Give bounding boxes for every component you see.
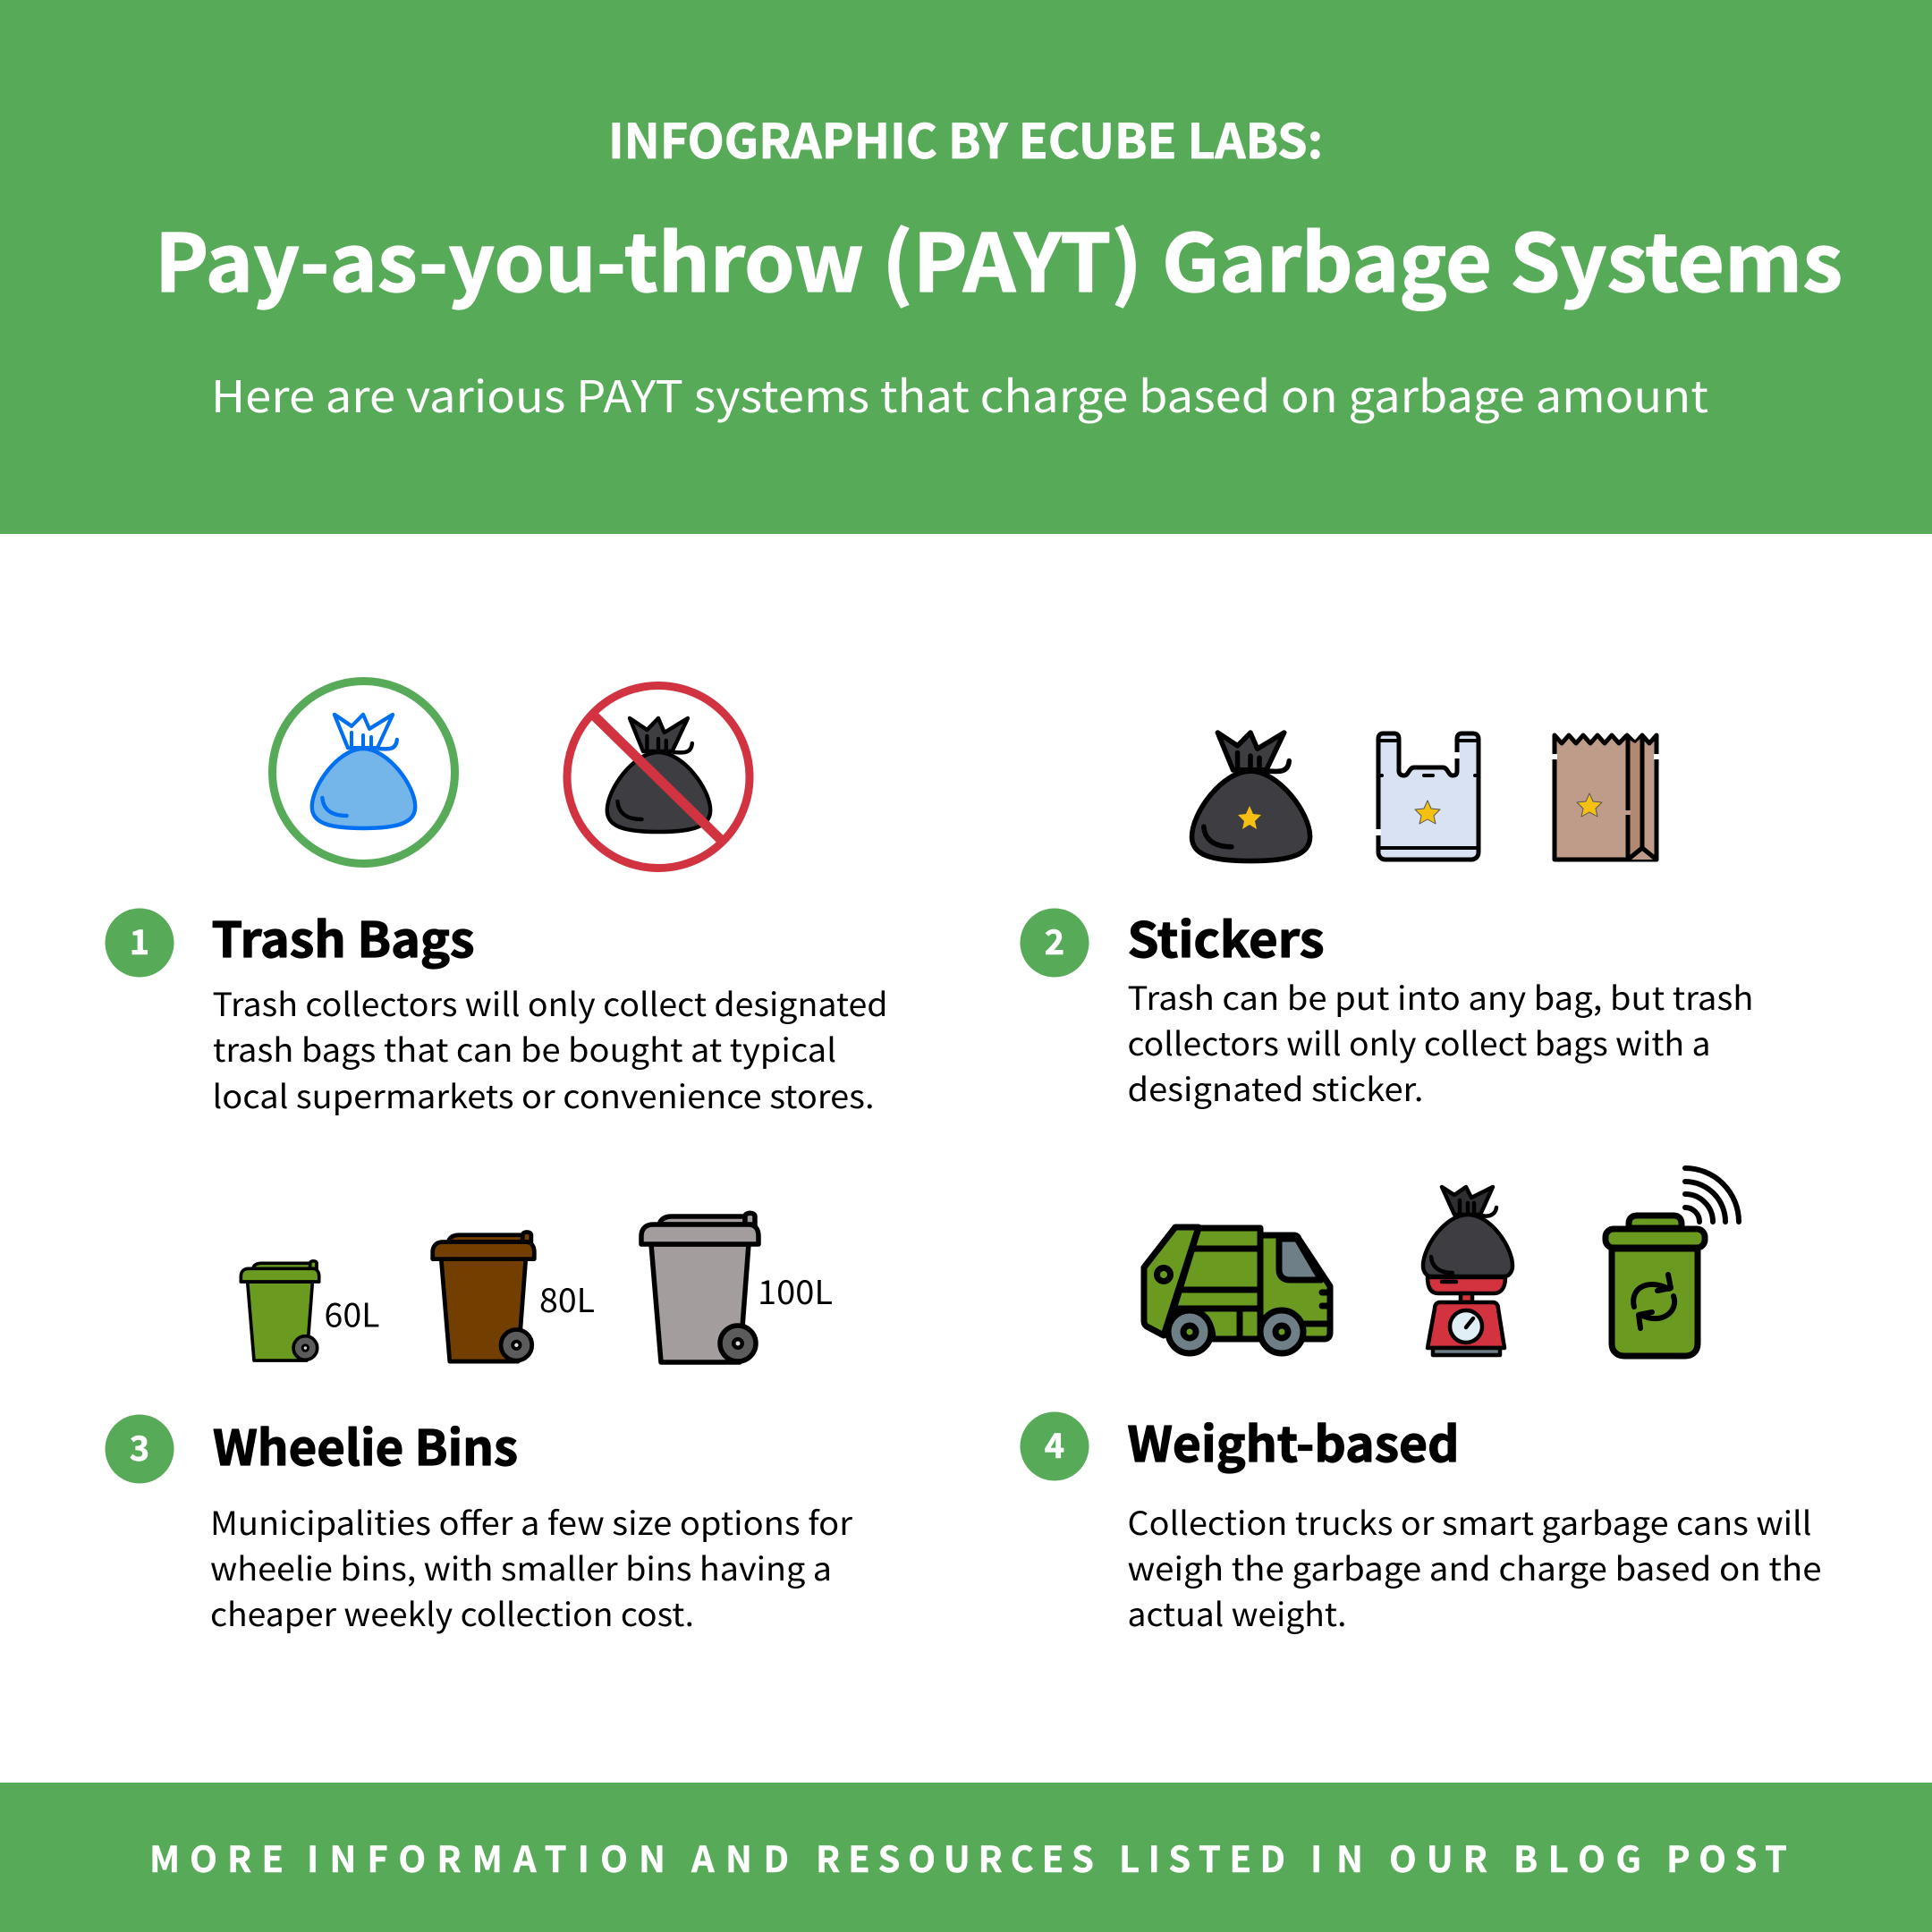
footer call to action: INFORMATION bbox=[307, 1831, 665, 1883]
icon: 100L grey wheelie bin: 100L bbox=[758, 1266, 833, 1314]
body: stickers bbox=[1127, 973, 1753, 1111]
body: trash bags: trash bags that can be bought at typical bbox=[213, 1025, 836, 1072]
body: stickers: Trash can be put into any bag, but trash bbox=[1127, 973, 1753, 1020]
title: Systems bbox=[1510, 199, 1843, 315]
icon: black trash bag crossed out in red bbox=[567, 685, 750, 868]
icon: plastic bag with sticker bbox=[1378, 733, 1479, 860]
step 2: stickers bbox=[1020, 901, 1753, 1111]
title: Garbage bbox=[1162, 199, 1492, 315]
body: wheelie bins bbox=[210, 1498, 853, 1636]
body: wheelie bins: Municipalities offer a few size options for bbox=[210, 1498, 853, 1545]
footer banner bbox=[0, 1783, 1932, 1932]
heading: weight-based: Weight-based bbox=[1127, 1405, 1460, 1476]
heading: wheelie bins: Wheelie Bins bbox=[213, 1409, 518, 1479]
icon: 80L brown wheelie bin bbox=[433, 1232, 595, 1361]
footer call to action: BLOG bbox=[1513, 1831, 1641, 1883]
body: trash bags: local supermarkets or convenience stores. bbox=[213, 1072, 875, 1118]
header banner bbox=[0, 0, 1932, 534]
icon: paper bag with sticker bbox=[1555, 735, 1657, 860]
number badge 2: 2 bbox=[1045, 915, 1064, 964]
number badge 3: 3 bbox=[130, 1421, 149, 1470]
title: (PAYT) bbox=[882, 199, 1142, 315]
body: trash bags: Trash collectors will only collect designated bbox=[213, 979, 887, 1026]
icon: 80L brown wheelie bin: 80L bbox=[539, 1274, 595, 1322]
footer call to action: RESOURCES bbox=[816, 1831, 1094, 1883]
number badge 4 bbox=[1020, 1411, 1089, 1481]
number badge 1: 1 bbox=[130, 915, 149, 964]
footer call to action: OUR bbox=[1389, 1831, 1487, 1883]
number badge 1 bbox=[106, 909, 174, 977]
number badge 4: 4 bbox=[1045, 1419, 1064, 1468]
footer call to action: POST bbox=[1666, 1831, 1787, 1883]
icon: bag on kitchen scale bbox=[1423, 1187, 1513, 1355]
icon: garbage truck bbox=[1144, 1227, 1330, 1353]
body: weight-based: Collection trucks or smart garbage cans will bbox=[1127, 1498, 1812, 1545]
heading: trash bags: Trash Bags bbox=[211, 901, 474, 971]
title bbox=[155, 199, 1843, 315]
subtitle: Here are various PAYT systems that charge based on garbage amount bbox=[211, 362, 1708, 426]
body: stickers: collectors will only collect bags with a bbox=[1127, 1019, 1710, 1065]
body: stickers: designated sticker. bbox=[1127, 1064, 1424, 1111]
icon: 60L green wheelie bin bbox=[241, 1261, 379, 1360]
icon: black bag with sticker bbox=[1192, 733, 1310, 861]
step 1: trash bags bbox=[106, 901, 887, 1118]
footer call to action: LISTED bbox=[1119, 1831, 1285, 1883]
body: weight-based: actual weight. bbox=[1127, 1589, 1347, 1636]
kicker: infographic by Ecube Labs: INFOGRAPHIC BY ECUBE LABS: bbox=[608, 105, 1323, 173]
icon: 60L green wheelie bin: 60L bbox=[324, 1288, 379, 1336]
number badge 2 bbox=[1020, 909, 1089, 977]
step 3: wheelie bins bbox=[106, 1409, 853, 1636]
heading: stickers: Stickers bbox=[1127, 901, 1324, 971]
step 4: weight-based bbox=[1020, 1405, 1821, 1636]
icon: accepted blue trash bag in green circle bbox=[272, 682, 454, 864]
body: wheelie bins: cheaper weekly collection cost. bbox=[210, 1589, 694, 1636]
icon: 100L grey wheelie bin bbox=[641, 1213, 833, 1362]
body: wheelie bins: wheelie bins, with smaller bins having a bbox=[210, 1544, 832, 1590]
footer call to action bbox=[149, 1831, 1787, 1883]
body: weight-based: weigh the garbage and charge based on the bbox=[1127, 1544, 1821, 1590]
footer call to action: AND bbox=[691, 1831, 789, 1883]
footer call to action: IN bbox=[1310, 1831, 1363, 1883]
body: trash bags bbox=[213, 979, 887, 1118]
footer call to action: MORE bbox=[149, 1831, 284, 1883]
number badge 3 bbox=[106, 1415, 174, 1483]
body: weight-based bbox=[1127, 1498, 1821, 1636]
title: Pay-as-you-throw bbox=[155, 199, 864, 315]
icon: smart bin with wifi signal bbox=[1606, 1168, 1739, 1356]
